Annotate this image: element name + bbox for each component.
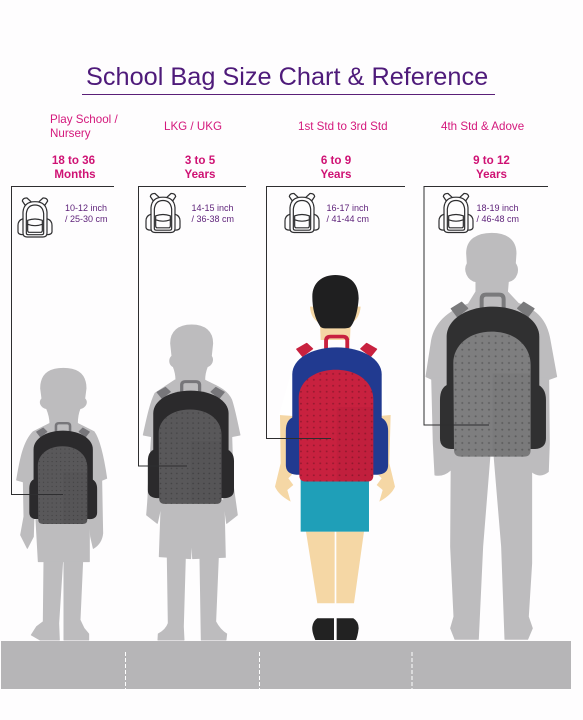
pointer line: coloured child (266, 186, 405, 438)
pointer line: older child (424, 186, 548, 425)
icon: backpack 3 (285, 193, 319, 232)
column 2 text: Years (185, 168, 215, 181)
column 4 text: 9 to 12 (473, 154, 510, 167)
legs (306, 532, 364, 603)
hair (312, 275, 359, 328)
pointer line: toddler (12, 186, 114, 494)
column 1 text: Nursery (50, 127, 91, 140)
figure: child with black backpack (143, 325, 240, 640)
size: 16-17 inch (326, 203, 369, 224)
title: School Bag Size Chart & Reference (86, 63, 488, 91)
column 3 text: 1st Std to 3rd Std (298, 120, 388, 133)
column 2 text: 3 to 5 (185, 154, 216, 167)
backpack (440, 295, 546, 457)
figure: toddler with black backpack (17, 368, 107, 640)
column 3 text: Years (321, 168, 351, 181)
shirt (279, 353, 391, 416)
icon: backpack 1 (18, 198, 52, 237)
pointer line: child (138, 186, 246, 466)
size: 16-17 inch: 16-17 inch (326, 203, 369, 213)
backpack (148, 382, 234, 504)
shorts (301, 479, 369, 532)
size: 10-12 inch (65, 203, 108, 224)
size: 14-15 inch (192, 203, 234, 224)
neck and ears (310, 307, 361, 340)
icon: backpack 4 (439, 193, 473, 232)
size: 10-12 inch: / 25-30 cm (65, 214, 108, 224)
column 4 text: Years (476, 168, 507, 181)
size: 14-15 inch: / 36-38 cm (192, 214, 234, 224)
backpack (286, 337, 388, 482)
column 2 text (164, 120, 222, 181)
column 1 text: 18 to 36 (52, 154, 96, 167)
column 1 text: Months (54, 168, 96, 181)
floor (1, 641, 571, 689)
title underline (82, 94, 495, 95)
size: 10-12 inch: 10-12 inch (65, 203, 107, 213)
column 3 text: 6 to 9 (321, 154, 352, 167)
size: 14-15 inch: 14-15 inch (192, 203, 234, 213)
backpack (29, 423, 97, 524)
icon: backpack 2 (146, 193, 180, 232)
column 3 text (298, 120, 388, 181)
arms and hands (275, 415, 395, 502)
size: 18-19 inch: / 46-48 cm (476, 214, 519, 224)
column 2 text: LKG / UKG (164, 120, 222, 133)
column 1 text: Play School / (50, 113, 118, 126)
figure: coloured child with blue and red backpack (275, 275, 395, 640)
figure: older child with grey backpack (426, 233, 557, 639)
size: 18-19 inch (476, 203, 519, 224)
size: 18-19 inch: 18-19 inch (476, 203, 519, 213)
column 1 text (50, 113, 118, 181)
column 4 text: 4th Std & Adove (441, 120, 524, 133)
column 4 text (441, 120, 524, 181)
shoes (312, 618, 359, 640)
size: 16-17 inch: / 41-44 cm (326, 214, 369, 224)
